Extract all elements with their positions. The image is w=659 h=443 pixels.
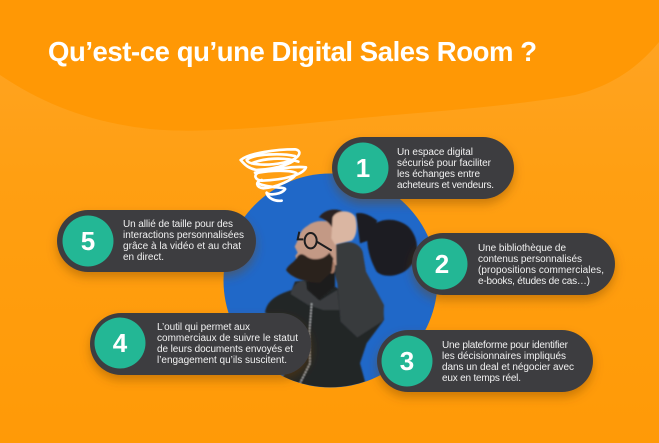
- pill 5: 5: [81, 226, 95, 256]
- blue circle: [224, 174, 438, 388]
- scribble icon: [241, 149, 306, 201]
- pill 2 text: Une bibliothèque de: [478, 243, 566, 254]
- pill 2 text: contenus personnalisés: [478, 254, 582, 265]
- pill 4: [90, 313, 311, 375]
- pill 3 text: [442, 340, 574, 384]
- pill 4 text: l’engagement qu’ils suscitent.: [157, 355, 287, 366]
- pill 2 text: (propositions commerciales,: [478, 265, 604, 276]
- pill 2: [412, 233, 615, 295]
- pill 3 text: eux en temps réel.: [442, 373, 521, 384]
- pill 1: [332, 137, 514, 199]
- hood: [291, 281, 339, 310]
- pill 4: 4: [113, 328, 128, 358]
- pill 2 text: e-books, études de cas…): [478, 276, 590, 287]
- pill 5: [57, 210, 256, 272]
- glasses: [298, 232, 332, 251]
- zipper: [300, 303, 312, 383]
- pill 5 text: interactions personnalisées: [123, 230, 244, 241]
- pill 5 text: grâce à la vidéo et au chat: [123, 241, 241, 252]
- pill 1 text: [397, 147, 494, 191]
- pill 5 text: [123, 219, 244, 263]
- pill 3: 3: [400, 346, 414, 376]
- number circle 5: [62, 216, 114, 266]
- hoodie torso: [265, 280, 384, 393]
- pill 3: [377, 330, 593, 392]
- pill 4 text: L’outil qui permet aux: [157, 322, 250, 333]
- pill 1 text: acheteurs et vendeurs.: [397, 180, 494, 191]
- number circle 4: [94, 318, 146, 368]
- pill 4 text: commerciaux de suivre le statut: [157, 333, 298, 344]
- number circle 2: [416, 238, 468, 290]
- pill 2 text: [478, 243, 604, 287]
- pill 3 text: les décisionnaires impliqués: [442, 351, 566, 362]
- pill 1 text: Un espace digital: [397, 147, 473, 158]
- neck: [307, 263, 335, 300]
- number circle 1: [338, 142, 388, 194]
- pill 3 text: Une plateforme pour identifier: [442, 340, 569, 351]
- top wave shape: [0, 0, 659, 131]
- beard: [286, 253, 333, 283]
- hand: [331, 211, 357, 245]
- hair: [319, 209, 343, 237]
- face: [295, 221, 337, 272]
- pill 2: 2: [435, 249, 449, 279]
- number circle 3: [382, 336, 432, 386]
- raised arm: [333, 242, 384, 337]
- pill 4 text: de leurs documents envoyés et: [157, 344, 293, 355]
- ear and shadow: [329, 261, 335, 273]
- photo: man holding his head: [265, 209, 417, 393]
- pill 5 text: en direct.: [123, 252, 164, 263]
- pill 4 text: [157, 322, 298, 366]
- title: Qu’est-ce qu’une Digital Sales Room ?: [48, 36, 537, 67]
- pill 3 text: dans un deal et négocier avec: [442, 362, 574, 373]
- pill 1 text: sécurisé pour faciliter: [397, 158, 492, 169]
- pill 1: 1: [356, 153, 370, 183]
- pill 1 text: les échanges entre: [397, 169, 480, 180]
- cap: [356, 213, 417, 276]
- pill 5 text: Un allié de taille pour des: [123, 219, 233, 230]
